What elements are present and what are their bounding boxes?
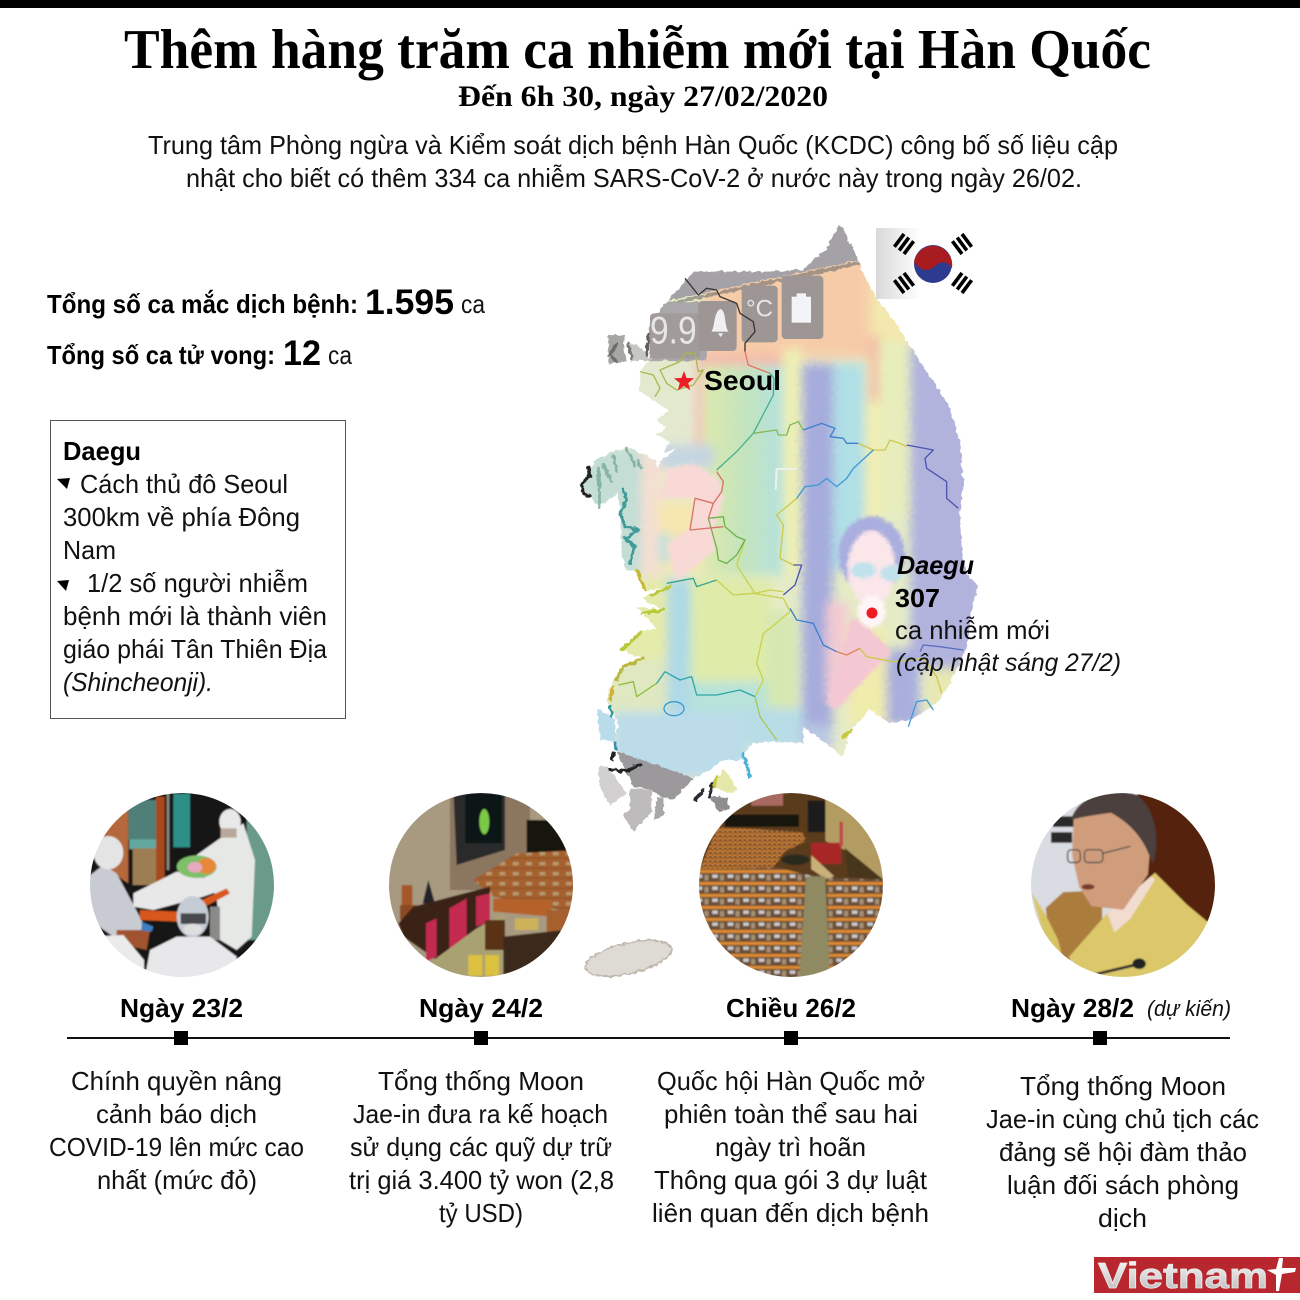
photo: National Assembly podium and vote screen xyxy=(387,790,577,980)
text block: 26/2 event: phiên toàn thể sau hai xyxy=(664,1099,918,1129)
panel: Daegu information box: (Shincheonji). xyxy=(63,667,213,697)
text block: 26/2 event: Thông qua gói 3 dự luật xyxy=(654,1165,928,1195)
Daegu marker and callout: Daegu xyxy=(897,550,974,580)
icon: South Korea flag xyxy=(876,228,976,299)
panel: Daegu information box: bệnh mới là thành viên xyxy=(63,601,327,631)
intro text: nhật cho biết có thêm 334 ca nhiễm SARS-CoV-2 ở nước này trong ngày 26/02. xyxy=(186,163,1082,193)
timeline date: Ngày 28/2 xyxy=(1011,993,1231,1023)
statistic: total deaths xyxy=(47,334,352,373)
intro text xyxy=(148,130,1118,193)
Daegu marker and callout xyxy=(866,550,1121,677)
text block: 26/2 event: liên quan đến dịch bệnh xyxy=(652,1198,929,1228)
pink thermal hand shape xyxy=(658,463,724,582)
panel: Daegu information box: 300km về phía Đông xyxy=(63,502,300,532)
panel: Daegu information box: giáo phái Tân Thiên Địa xyxy=(63,634,328,664)
text block: 28/2 event: đảng sẽ hội đàm thảo xyxy=(999,1137,1247,1167)
timeline date: Chiều 26/2: Chiều 26/2 xyxy=(726,993,856,1023)
photo: National Assembly plenary session xyxy=(699,793,883,977)
timeline date: Ngày 28/2: (dự kiến) xyxy=(1147,996,1231,1021)
panel: Daegu information box xyxy=(50,420,346,718)
bottom left gray band xyxy=(617,752,694,800)
text block: 23/2 event: Chính quyền nâng xyxy=(71,1066,282,1096)
text block: 28/2 event xyxy=(986,1071,1259,1233)
logo: Vietnam+: Vietnam xyxy=(1098,1255,1268,1296)
thermal camera readouts: °C xyxy=(746,296,773,323)
text block: 26/2 event xyxy=(652,1066,929,1228)
text block: 24/2 event: Tổng thống Moon xyxy=(378,1066,584,1096)
timeline axis xyxy=(67,1031,1230,1045)
text block: 24/2 event: tỷ USD) xyxy=(439,1198,523,1228)
Daegu marker and callout: (cập nhật sáng 27/2) xyxy=(896,649,1121,677)
Seoul marker: Seoul xyxy=(704,365,781,396)
map of South Korea with thermal image fill xyxy=(570,215,1003,983)
timeline date: Ngày 28/2: Ngày 28/2 xyxy=(1011,993,1134,1023)
text block: 23/2 event xyxy=(49,1066,304,1195)
text block: 26/2 event: ngày trì hoãn xyxy=(715,1132,866,1162)
thermal camera readouts: 9.9 xyxy=(650,309,697,353)
Daegu marker and callout: 307 xyxy=(895,583,940,613)
subtitle date: Đến 6h 30, ngày 27/02/2020 xyxy=(458,80,828,113)
statistic: total deaths: ca xyxy=(328,340,352,370)
statistic: total cases: Tổng số ca mắc dịch bệnh: xyxy=(47,289,358,319)
panel: Daegu information box: Daegu xyxy=(63,436,141,466)
intro text: Trung tâm Phòng ngừa và Kiểm soát dịch bệnh Hàn Quốc (KCDC) công bố số liệu cập xyxy=(148,130,1118,160)
text block: 28/2 event: Tổng thống Moon xyxy=(1020,1071,1226,1101)
Jeju island xyxy=(582,933,675,983)
text block: 23/2 event: cảnh báo dịch xyxy=(96,1099,257,1129)
text block: 26/2 event: Quốc hội Hàn Quốc mở xyxy=(657,1066,925,1096)
timeline date: Ngày 24/2: Ngày 24/2 xyxy=(419,993,543,1023)
photo: medical workers with stretcher xyxy=(87,790,277,980)
statistic: total deaths: Tổng số ca tử vong: xyxy=(47,340,275,370)
panel: Daegu information box: Cách thủ đô Seoul xyxy=(80,469,288,499)
top gray camera band xyxy=(668,225,858,300)
thermal portrait at Daegu xyxy=(827,517,905,708)
text block: 28/2 event: luận đối sách phòng xyxy=(1007,1170,1239,1200)
thermal camera readouts xyxy=(650,276,823,490)
text block: 24/2 event: trị giá 3.400 tỷ won (2,8 xyxy=(349,1165,614,1195)
panel: Daegu information box: Nam xyxy=(63,535,116,565)
photo: President Moon Jae-in xyxy=(1031,793,1215,977)
text block: 28/2 event: Jae-in cùng chủ tịch các xyxy=(986,1104,1259,1134)
coastal islands and colored shoreline fragments xyxy=(582,333,852,832)
text block: 24/2 event: sử dụng các quỹ dự trữ xyxy=(350,1132,612,1162)
statistic: total cases: 1.595 xyxy=(365,283,454,322)
panel: Daegu information box: 1/2 số người nhiễm xyxy=(87,568,308,598)
text block: 28/2 event: dịch xyxy=(1098,1203,1147,1233)
statistic: total deaths: 12 xyxy=(283,334,321,373)
statistic: total cases xyxy=(47,283,485,322)
text block: 24/2 event: Jae-in đưa ra kế hoạch xyxy=(353,1099,608,1129)
text block: 24/2 event xyxy=(349,1066,614,1228)
Daegu marker and callout: ca nhiễm mới xyxy=(895,615,1050,645)
logo: Vietnam+ xyxy=(1094,1255,1300,1296)
text block: 23/2 event: nhất (mức đỏ) xyxy=(97,1165,257,1195)
timeline date: Ngày 23/2: Ngày 23/2 xyxy=(120,993,243,1023)
title: Thêm hàng trăm ca nhiễm mới tại Hàn Quốc xyxy=(124,19,1151,81)
top black bar xyxy=(0,0,1300,8)
text block: 23/2 event: COVID-19 lên mức cao xyxy=(49,1132,304,1162)
provincial boundaries xyxy=(618,278,963,740)
statistic: total cases: ca xyxy=(461,289,485,319)
